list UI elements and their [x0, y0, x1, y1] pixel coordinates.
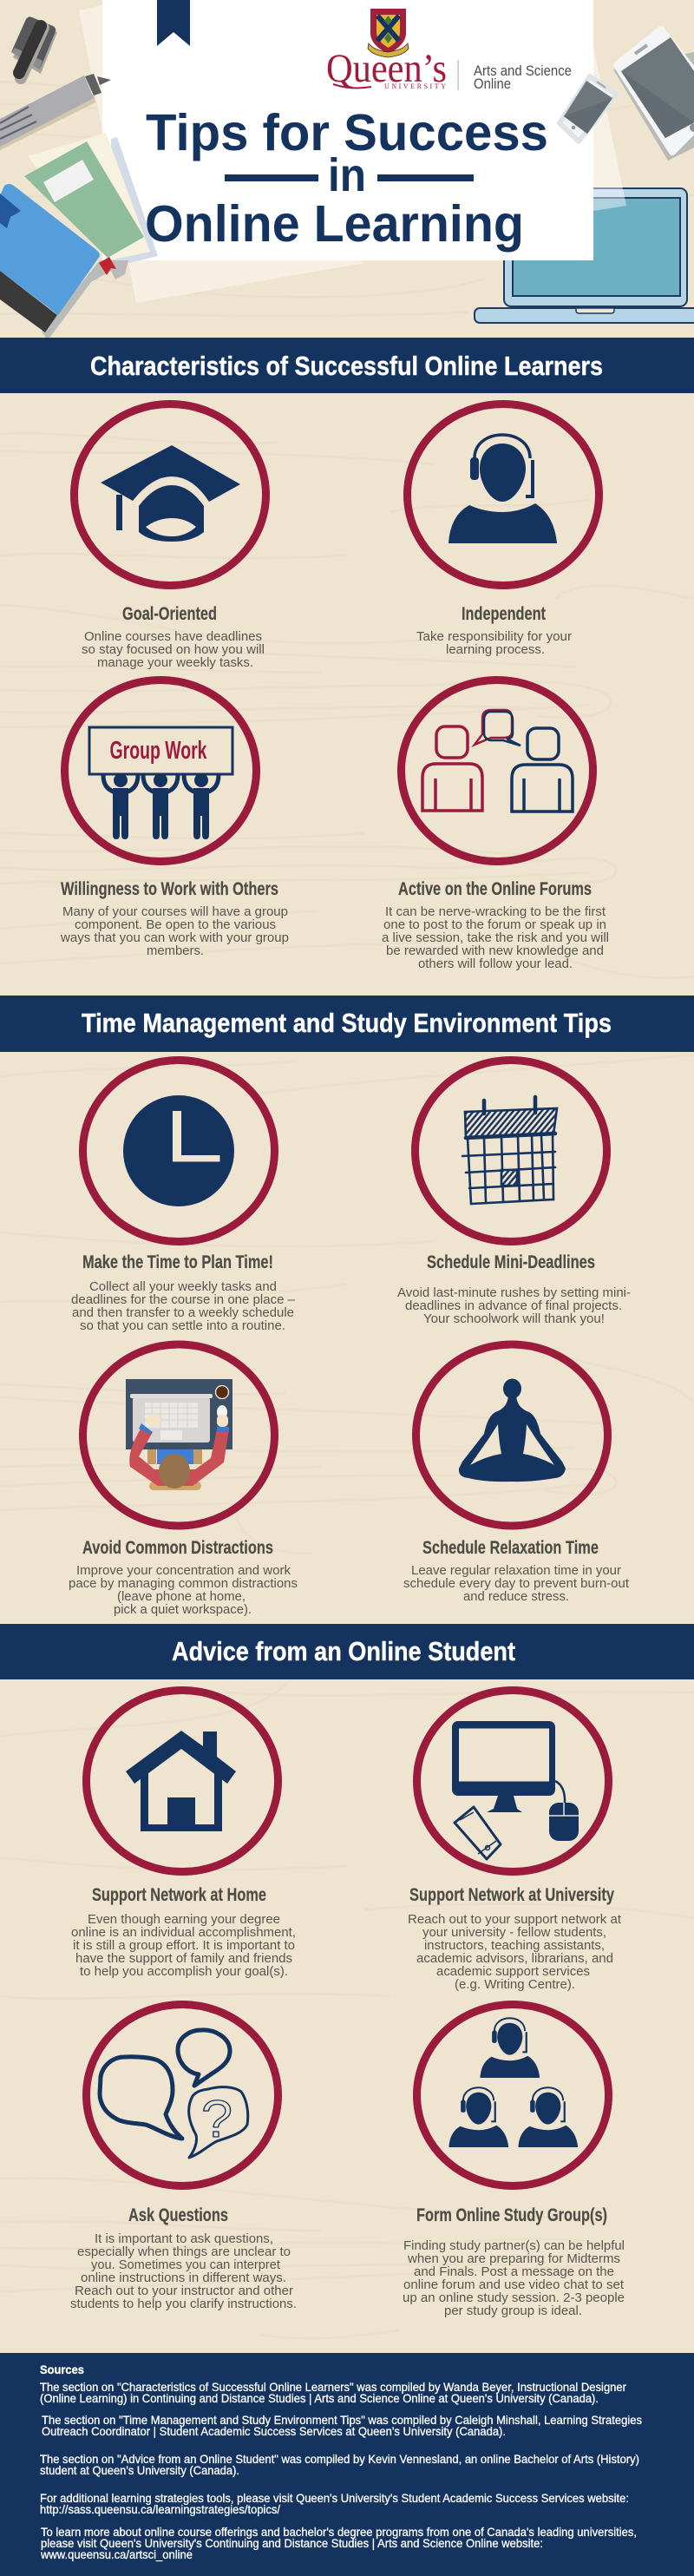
Queen's University logo: Arts and Science: [474, 62, 572, 79]
panel: active on the online forums: [382, 680, 609, 971]
panel: form online study groups: online forum and use video chat to set: [403, 2277, 625, 2292]
panel: sources footer: The section on "Advice from an Online Student" was compiled by Kevin Vennesland, an online Bachelor of Arts (History): [40, 2452, 639, 2466]
icon: two people talking: [422, 710, 573, 812]
panel: sources footer: Outreach Coordinator | Student Academic Success Services at Queen's University (Canada).: [42, 2424, 506, 2438]
panel: ask questions: Ask Questions: [128, 2205, 228, 2225]
icon: meditating figure: [459, 1378, 566, 1482]
panel: support network at home: to help you accomplish your goal(s).: [80, 1964, 288, 1979]
panel: support network at university: your university - fellow students,: [422, 1925, 606, 1940]
panel: sources footer: (Online Learning) in Continuing and Distance Studies | Arts and Science Online at Queen's University (Canada).: [40, 2391, 599, 2405]
icon: clock: [123, 1095, 234, 1206]
icon: person at laptop from above: [126, 1379, 232, 1490]
icon: green notebook: [24, 133, 158, 340]
icon: marker pen: [0, 74, 111, 150]
panel: make the time to plan time: Collect all your weekly tasks and: [89, 1279, 277, 1294]
Queen's University logo: Online: [474, 76, 511, 92]
panel: form online study groups: [403, 2005, 625, 2318]
panel: sources footer: http://sass.queensu.ca/learningstrategies/topics/: [40, 2502, 280, 2516]
title: [145, 104, 548, 253]
icon: university crest: [368, 9, 409, 57]
panel: support network at university: Support Network at University: [409, 1885, 614, 1905]
panel: avoid common distractions: Improve your concentration and work: [76, 1563, 291, 1578]
panel: independent: Take responsibility for your: [416, 629, 572, 644]
panel: independent: Independent: [462, 604, 546, 624]
panel: active on the online forums: Active on the Online Forums: [398, 879, 592, 899]
panel: schedule relaxation time: Leave regular relaxation time in your: [411, 1563, 621, 1578]
panel: goal-oriented: Online courses have deadlines: [84, 629, 262, 644]
heading banner: time management: Time Management and Study Environment Tips: [82, 1008, 612, 1038]
icon: three people with headsets: [448, 2018, 578, 2147]
panel: willingness to work with others: Many of your courses will have a group: [62, 904, 288, 919]
panel: support network at university: (e.g. Writing Centre).: [455, 1977, 575, 1992]
panel: support network at university: Reach out to your support network at: [408, 1912, 622, 1927]
panel: make the time to plan time: Make the Time to Plan Time!: [82, 1252, 273, 1272]
title: Online Learning: [145, 195, 524, 253]
panel: active on the online forums: be rewarded with new knowledge and: [386, 943, 604, 958]
panel: ask questions: online instructions in different ways.: [81, 2270, 286, 2285]
white title panel: [102, 0, 593, 260]
panel: sources footer: student at Queen's University (Canada).: [40, 2463, 239, 2477]
panel: schedule mini-deadlines: deadlines in advance of final projects.: [405, 1298, 622, 1313]
panel: active on the online forums: one to post to the forum or speak up in: [383, 917, 606, 932]
panel: avoid common distractions: (leave phone at home,: [117, 1589, 246, 1604]
panel: support network at university: academic support services: [436, 1964, 590, 1979]
panel: support network at university: instructors, teaching assistants,: [424, 1938, 605, 1953]
panel: sources footer: The section on "Characteristics of Successful Online Learners" was compiled by Wanda Beyer, Instructional Designer: [40, 2380, 626, 2394]
panel: make the time to plan time: [71, 1061, 296, 1333]
panel: sources footer: www.queensu.ca/artsci_online: [40, 2547, 193, 2561]
panel: avoid common distractions: pace by managing common distractions: [69, 1576, 298, 1591]
panel: form online study groups: up an online study session. 2-3 people: [403, 2290, 625, 2305]
panel: goal-oriented: [75, 404, 265, 670]
panel: support network at home: Even though earning your degree: [88, 1912, 280, 1927]
panel: schedule mini-deadlines: [397, 1061, 631, 1326]
panel: make the time to plan time: and then transfer to a weekly schedule: [72, 1305, 294, 1320]
panel: sources footer: The section on "Time Management and Study Environment Tips" was compiled by Caleigh Minshall, Learning Strategies: [42, 2413, 642, 2427]
icon: person with headset: [448, 435, 557, 543]
Queen's University logo: [326, 9, 572, 92]
icon: computer, mouse and phone: [452, 1721, 579, 1859]
panel: schedule relaxation time: [403, 1344, 630, 1604]
panel: support network at university: [408, 1691, 622, 1992]
panel: support network at home: it is still a group effort. It is important to: [73, 1938, 295, 1953]
panel: schedule mini-deadlines: Schedule Mini-Deadlines: [427, 1252, 595, 1272]
icon: large phone: [613, 30, 694, 161]
panel: form online study groups: Finding study partner(s) can be helpful: [403, 2238, 625, 2253]
panel: ask questions: Reach out to your instructor and other: [75, 2284, 293, 2298]
icon: group work sign: Group Work: [109, 737, 207, 765]
panel: independent: [408, 404, 599, 657]
icon: speech bubbles: [100, 2030, 248, 2158]
panel: ask questions: you. Sometimes you can interpret: [91, 2257, 281, 2272]
panel: sources footer: Sources: [40, 2362, 84, 2376]
icon: group work sign: [89, 727, 232, 839]
panel: sources footer: For additional learning strategies tools, please visit Queen's University's Student Academic Success Services website:: [40, 2491, 629, 2505]
bookmark ribbon: [157, 0, 190, 46]
heading banner: characteristics: Characteristics of Successful Online Learners: [90, 351, 603, 381]
header illustration: items behind panel: [11, 3, 694, 323]
panel: avoid common distractions: Avoid Common Distractions: [82, 1538, 273, 1558]
panel: active on the online forums: others will follow your lead.: [418, 956, 573, 971]
panel: support network at home: [71, 1691, 296, 1979]
panel: support network at home: have the support of family and friends: [75, 1951, 292, 1966]
icon: blue book: [0, 184, 100, 332]
panel: make the time to plan time: deadlines for the course in one place –: [71, 1292, 296, 1307]
panel: active on the online forums: a live session, take the risk and you will: [382, 930, 609, 945]
panel: schedule relaxation time: schedule every day to prevent burn-out: [403, 1576, 630, 1591]
icon: laptop: [475, 188, 694, 323]
panel: goal-oriented: so stay focused on how you will: [82, 642, 265, 657]
panel: willingness to work with others: [60, 680, 289, 958]
panel: schedule relaxation time: and reduce stress.: [463, 1589, 569, 1604]
panel: ask questions: especially when things are unclear to: [77, 2244, 291, 2259]
icon: pen clip: [11, 16, 57, 78]
panel: independent: learning process.: [446, 642, 545, 657]
heading banner: time management: [0, 996, 694, 1052]
Queen's University logo: UNIVERSITY: [384, 82, 446, 90]
panel: ask questions: students to help you clarify instructions.: [70, 2297, 297, 2311]
panel: support network at home: online is an individual accomplishment,: [71, 1925, 296, 1940]
panel: willingness to work with others: members.: [147, 943, 204, 958]
panel: form online study groups: when you are preparing for Midterms: [407, 2251, 620, 2266]
panel: active on the online forums: It can be nerve-wracking to be the first: [385, 904, 606, 919]
panel: sources footer: To learn more about online course offerings and bachelor's degree programs from one of Canada's leading universities,: [41, 2525, 637, 2539]
heading banner: advice: Advice from an Online Student: [172, 1636, 515, 1666]
panel: schedule mini-deadlines: Your schoolwork will thank you!: [423, 1311, 605, 1326]
heading banner: advice: [0, 1624, 694, 1679]
panel: ask questions: It is important to ask questions,: [95, 2231, 273, 2246]
heading banner: characteristics: [0, 338, 694, 393]
panel: form online study groups: and Finals. Post a message on the: [414, 2264, 614, 2279]
title: in: [328, 149, 366, 201]
panel: schedule mini-deadlines: Avoid last-minute rushes by setting mini-: [397, 1285, 631, 1300]
Queen's University logo: Queen’s: [326, 46, 447, 91]
title: Tips for Success: [146, 104, 548, 161]
panel: sources footer: please visit Queen's University's Continuing and Distance Studies | Arts and Science Online website:: [41, 2536, 543, 2550]
panel: support network at university: academic advisors, librarians, and: [416, 1951, 613, 1966]
paper sheet over laptop: [593, 46, 626, 211]
icon: house: [126, 1731, 236, 1831]
panel: avoid common distractions: pick a quiet workspace).: [114, 1602, 252, 1617]
icon: graduation cap: [101, 445, 240, 542]
panel: make the time to plan time: so that you can settle into a routine.: [80, 1318, 285, 1333]
panel: support network at home: Support Network at Home: [92, 1885, 266, 1905]
panel: form online study groups: per study group is ideal.: [444, 2303, 582, 2318]
panel: avoid common distractions: [69, 1344, 298, 1617]
header illustration: items over panel: [0, 74, 616, 340]
panel: willingness to work with others: ways that you can work with your group: [60, 930, 289, 945]
icon: speech bubbles: ?: [201, 2090, 232, 2148]
icon: hand-drawn calendar: [462, 1097, 557, 1204]
panel: form online study groups: Form Online Study Group(s): [416, 2205, 607, 2225]
panel: goal-oriented: Goal-Oriented: [122, 604, 217, 624]
panel: ask questions: [70, 2005, 297, 2311]
panel: goal-oriented: manage your weekly tasks.: [97, 655, 253, 670]
panel: sources footer: [0, 2353, 694, 2576]
panel: willingness to work with others: component. Be open to the various: [75, 917, 276, 932]
panel: schedule relaxation time: Schedule Relaxation Time: [422, 1538, 599, 1558]
panel: willingness to work with others: Willingness to Work with Others: [61, 879, 278, 899]
icon: small phone: [560, 76, 616, 141]
paper sheet behind panel: [79, 3, 364, 303]
